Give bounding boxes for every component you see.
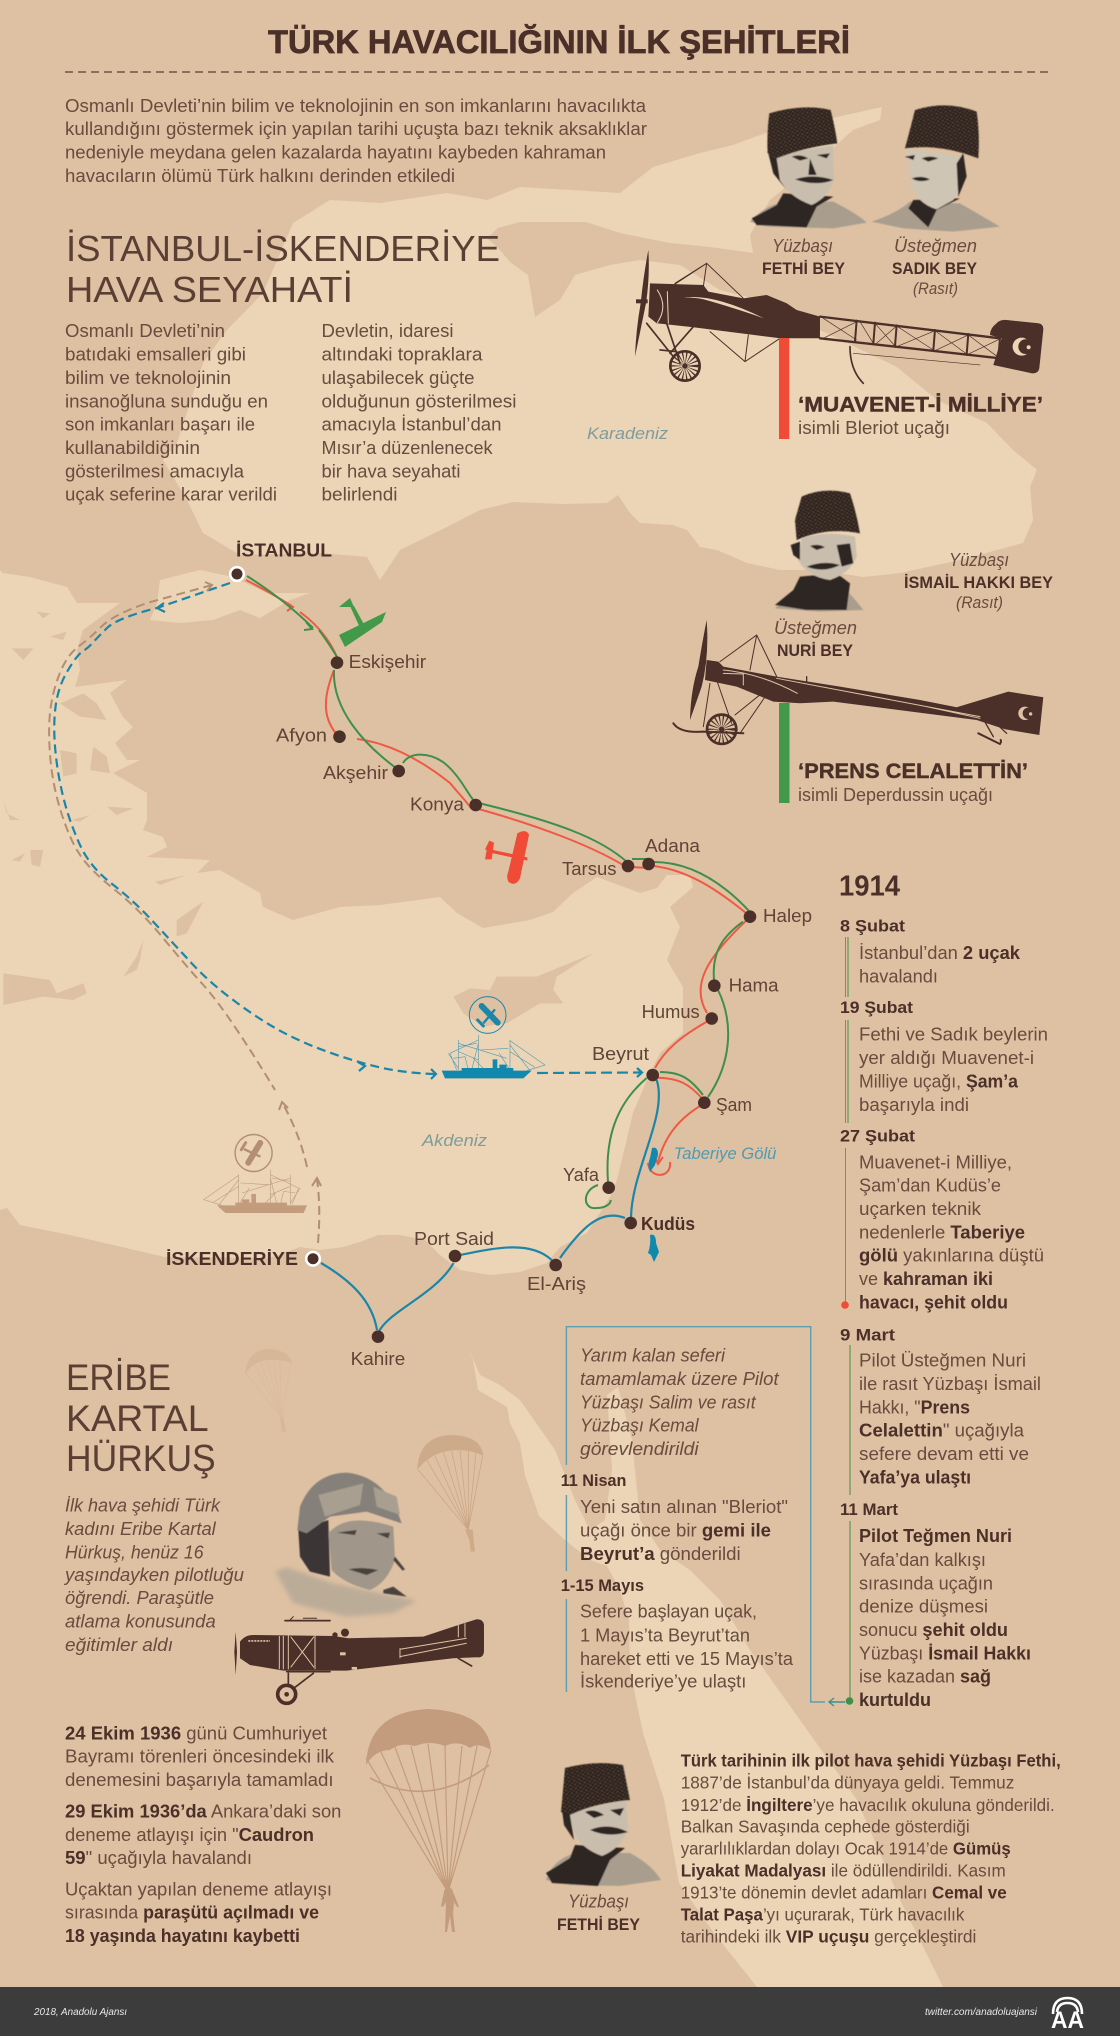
large parachute <box>366 1709 491 1932</box>
biography text <box>681 1751 1061 1947</box>
entry: 11 Mart: denize düşmesi <box>859 1597 988 1617</box>
heading: Eribe Kartal Hürkuş: HÜRKUŞ <box>66 1438 216 1479</box>
text: Eribe test jumps: 29 Ekim 1936’da Ankara’daki son <box>65 1802 341 1822</box>
entry: 9 Mart: Pilot Üsteğmen Nuri <box>859 1351 1026 1371</box>
biography text: Talat Paşa’yı uçurarak, Türk havacılık <box>681 1905 965 1925</box>
portrait labels: Fethi and Sadık: FETHİ BEY <box>762 259 846 278</box>
city labels: Humus <box>642 1002 700 1022</box>
heading: journey <box>66 228 500 310</box>
text: Eribe test jumps: 24 Ekim 1936 günü Cumhuriyet <box>65 1723 327 1743</box>
route: Prens Celalettin, green line <box>247 576 750 1208</box>
portrait labels: İsmail Hakkı and Nuri: Yüzbaşı <box>949 550 1009 570</box>
city labels: Afyon <box>276 726 327 746</box>
portrait labels: İsmail Hakkı and Nuri: NURİ BEY <box>777 641 854 660</box>
icon: green plane <box>339 598 386 647</box>
heading: Eribe Kartal Hürkuş: KARTAL <box>66 1398 209 1439</box>
entry: 11 Mart: 11 Mart <box>840 1500 898 1519</box>
entry: 11 Mart <box>840 1500 1031 1710</box>
text column one: son imkanları başarı ile <box>65 414 255 434</box>
marker bar: red <box>779 338 789 439</box>
footer credit: 2018, Anadolu Ajansı <box>33 2006 127 2018</box>
small parachute, faint <box>245 1349 292 1432</box>
text column two <box>322 321 516 504</box>
Eribe intro text <box>63 1496 244 1655</box>
entry: 8 Şubat <box>840 916 1021 986</box>
entry: 8 Şubat: havalandı <box>859 966 938 986</box>
plane: Caudron 59 <box>234 1617 484 1703</box>
text: Eribe test jumps: Bayramı törenleri öncesindeki ilk <box>65 1747 335 1767</box>
entry: 27 Şubat: Şam’dan Kudüs’e <box>859 1176 1001 1196</box>
timeline: 1914 <box>839 870 1048 1710</box>
text column one: insanoğluna sunduğu en <box>65 392 268 412</box>
entry: 27 Şubat: ve kahraman iki <box>859 1269 993 1289</box>
icon: Dead Sea <box>648 1235 659 1262</box>
city labels: Kudüs <box>641 1214 695 1234</box>
city labels: Konya <box>410 794 465 814</box>
entry: 9 Mart: Yafa’ya ulaştı <box>859 1467 971 1487</box>
portrait labels: İsmail Hakkı and Nuri: Üsteğmen <box>774 618 857 638</box>
city labels: Şam <box>716 1095 752 1115</box>
heading: journey: HAVA SEYAHATİ <box>66 269 353 310</box>
entry: 19 Şubat <box>840 998 1048 1115</box>
Eribe intro text: atlama konusunda <box>65 1612 216 1632</box>
route map <box>49 540 812 1369</box>
intro text: kullandığını göstermek için yapılan tarihi uçuşta bazı teknik aksaklıklar <box>65 119 647 139</box>
text column one: uçak seferine karar verildi <box>65 484 277 504</box>
icon: blue ship and plane <box>442 997 545 1078</box>
text column two: amacıyla İstanbul’dan <box>322 414 502 434</box>
entry: 11 Nisan <box>561 1471 788 1564</box>
portrait labels: Fethi and Sadık: Üsteğmen <box>894 236 977 256</box>
text column one: Osmanlı Devleti’nin <box>65 321 225 341</box>
entry: 11 Nisan: uçağı önce bir gemi ile <box>580 1521 771 1541</box>
portrait label: Fethi Bey: Yüzbaşı <box>568 1892 629 1912</box>
intro text <box>65 96 647 186</box>
Eribe intro text: Hürkuş, henüz 16 <box>65 1542 205 1562</box>
box intro: Yüzbaşı Kemal <box>580 1416 700 1436</box>
biography text: Balkan Savaşında cephede gösterdiği <box>681 1817 970 1837</box>
route: return by sea, tan dashed <box>49 582 321 1243</box>
city labels: İSKENDERİYE <box>166 1249 298 1269</box>
entry: 11 Nisan: 11 Nisan <box>561 1471 626 1490</box>
plane: Bleriot Muavenet-i Milliye <box>635 250 1043 383</box>
plane name: Muavenet-i Milliye: isimli Bleriot uçağı <box>798 418 950 438</box>
entry: 1-15 Mayıs <box>561 1576 794 1692</box>
biography text: tarihindeki ilk VIP uçuşu gerçekleştirdi <box>681 1927 976 1947</box>
text: Eribe test jumps: sırasında paraşütü açılmadı ve <box>65 1903 319 1923</box>
entry: 27 Şubat: Muavenet-i Milliye, <box>859 1152 1012 1172</box>
map: Red Sea and Gulf of Suez <box>467 1345 943 1987</box>
footer social: twitter.com/anadoluajansi <box>925 2006 1038 2018</box>
portrait labels: İsmail Hakkı and Nuri: İSMAİL HAKKI BEY <box>904 573 1054 592</box>
text: Eribe test jumps <box>65 1723 341 1946</box>
entry: 11 Mart: ise kazadan sağ <box>859 1667 991 1687</box>
heading: journey: İSTANBUL-İSKENDERİYE <box>66 228 500 269</box>
entry: 11 Mart: Yüzbaşı İsmail Hakkı <box>859 1643 1031 1663</box>
connector arrow <box>829 1698 845 1706</box>
portrait labels: İsmail Hakkı and Nuri: (Rasıt) <box>956 593 1003 612</box>
biography text: yararlılıklardan dolayı Ocak 1914’de Gümüş <box>681 1839 1011 1859</box>
entry: 11 Mart: Pilot Teğmen Nuri <box>859 1526 1012 1546</box>
map: Cyprus <box>453 953 593 1027</box>
city labels: Adana <box>645 836 701 856</box>
water labels: Taberiye Gölü <box>674 1144 777 1163</box>
city labels <box>166 540 812 1369</box>
entry: 9 Mart: Hakkı, "Prens <box>859 1397 970 1417</box>
map: Aegean and Mediterranean islands <box>3 612 203 1005</box>
route: outbound by sea, blue dashed <box>54 583 642 1079</box>
portrait labels: Fethi and Sadık: SADIK BEY <box>892 259 978 278</box>
intro text: Osmanlı Devleti’nin bilim ve teknolojinin en son imkanlarını havacılıkta <box>65 96 647 116</box>
text column two: Devletin, idaresi <box>322 321 454 341</box>
biography text: Türk tarihinin ilk pilot hava şehidi Yüzbaşı Fethi, <box>681 1751 1061 1771</box>
intro text: havacıların ölümü Türk halkını derinden etkiledi <box>65 166 455 186</box>
city labels: Beyrut <box>592 1044 649 1064</box>
Eribe intro text: eğitimler aldı <box>65 1635 173 1655</box>
entry: 11 Nisan: Yeni satın alınan "Bleriot" <box>580 1497 788 1517</box>
text column two: altındaki topraklara <box>322 344 484 364</box>
portrait labels: İsmail Hakkı and Nuri <box>774 550 1054 660</box>
entry: 9 Mart: sefere devam etti ve <box>859 1444 1029 1464</box>
text: Eribe test jumps: 18 yaşında hayatını kaybetti <box>65 1926 300 1946</box>
entry: 27 Şubat <box>840 1127 1044 1312</box>
entry: 19 Şubat: başarıyla indi <box>859 1095 969 1115</box>
heading: Eribe Kartal Hürkuş: ERİBE <box>66 1357 171 1398</box>
Eribe intro text: İlk hava şehidi Türk <box>65 1496 221 1516</box>
entry: 19 Şubat: yer aldığı Muavenet-i <box>859 1048 1034 1068</box>
city labels: Tarsus <box>562 859 616 879</box>
plane name: Muavenet-i Milliye <box>798 394 1043 438</box>
portrait labels: Fethi and Sadık <box>762 236 978 298</box>
city labels: Halep <box>763 906 812 926</box>
entry: 1-15 Mayıs: Sefere başlayan uçak, <box>580 1602 757 1622</box>
connector lines <box>566 1327 825 1702</box>
text column one: bilim ve teknolojinin <box>65 368 231 388</box>
portrait: Eribe Kartal Hürkuş <box>275 1473 417 1617</box>
timeline lines <box>846 937 850 1701</box>
text: Eribe test jumps: 59" uçağıyla havalandı <box>65 1848 252 1868</box>
text: Eribe test jumps: denemesini başarıyla tamamladı <box>65 1770 334 1790</box>
water labels <box>421 1131 777 1163</box>
intro text: nedeniyle meydana gelen kazalarda hayatını kaybeden kahraman <box>65 142 606 162</box>
entry: 1-15 Mayıs: İskenderiye’ye ulaştı <box>580 1672 746 1692</box>
entry: 1-15 Mayıs: 1-15 Mayıs <box>561 1576 644 1595</box>
plane: Deperdussin Prens Celalettin <box>673 620 1043 744</box>
city labels: Port Said <box>414 1229 494 1249</box>
logo: AA: AA <box>1051 2007 1084 2034</box>
entry: 19 Şubat: 19 Şubat <box>840 998 913 1017</box>
city labels: Akşehir <box>323 763 388 783</box>
biography text: 1912’de İngiltere’ye havacılık okuluna gönderildi. <box>681 1795 1055 1815</box>
entry: 11 Mart: sonucu şehit oldu <box>859 1620 1008 1640</box>
city labels: Yafa <box>563 1165 600 1185</box>
plane name: Muavenet-i Milliye: ‘MUAVENET-İ MİLLİYE’ <box>798 394 1043 416</box>
plane name: Prens Celalettin <box>798 760 1028 805</box>
entry: 9 Mart: 9 Mart <box>840 1326 895 1345</box>
text: Eribe test jumps: Uçaktan yapılan deneme atlayışı <box>65 1879 332 1899</box>
portrait labels: Fethi and Sadık: Yüzbaşı <box>772 236 833 256</box>
portrait: Nuri Bey <box>775 491 863 612</box>
text column one <box>65 321 277 504</box>
box: continuation of the flight <box>561 1327 845 1706</box>
entry: 27 Şubat: havacı, şehit oldu <box>859 1292 1008 1312</box>
plane name: Prens Celalettin: isimli Deperdussin uçağı <box>798 785 993 805</box>
small parachute <box>417 1435 483 1552</box>
sea label: Karadeniz: Karadeniz <box>587 424 669 443</box>
city labels: Eskişehir <box>349 652 426 672</box>
timeline end markers <box>841 1301 853 1705</box>
icon: Sea of Galilee <box>648 1148 658 1172</box>
city labels: El-Ariş <box>527 1274 586 1294</box>
portrait: Yüzbaşı Fethi Bey <box>546 1763 661 1886</box>
plane name: Prens Celalettin: ‘PRENS CELALETTİN’ <box>798 760 1028 783</box>
heading: Eribe Kartal Hürkuş <box>66 1357 216 1479</box>
text column one: gösterilmesi amacıyla <box>65 462 245 482</box>
biography text: 1913’te dönemin devlet adamları Cemal ve <box>681 1883 1007 1903</box>
text column two: Mısır’a düzenlenecek <box>322 438 493 458</box>
entry: 11 Mart: kurtuldu <box>859 1690 931 1710</box>
entry: 27 Şubat: nedenlerle Taberiye <box>859 1222 1025 1242</box>
portrait: Fethi and Sadık <box>750 105 1000 232</box>
entry: 9 Mart: ile rasıt Yüzbaşı İsmail <box>859 1374 1041 1394</box>
entry: 11 Mart: Yafa’dan kalkışı <box>859 1550 986 1570</box>
entry: 9 Mart <box>840 1326 1041 1487</box>
entry: 27 Şubat: gölü yakınlarına düştü <box>859 1246 1044 1266</box>
text column two: olduğunun gösterilmesi <box>322 392 516 412</box>
entry: 8 Şubat: 8 Şubat <box>840 916 905 936</box>
box intro: görevlendirildi <box>580 1439 700 1459</box>
entry: 1-15 Mayıs: 1 Mayıs’ta Beyrut’tan <box>580 1626 750 1646</box>
biography text: 1887’de İstanbul’da dünyaya geldi. Temmuz <box>681 1773 1014 1793</box>
box intro <box>580 1346 780 1459</box>
box intro: Yarım kalan seferi <box>580 1346 726 1366</box>
icon: tan ship and plane <box>204 1134 307 1213</box>
city dots <box>230 567 756 1343</box>
city labels: Kahire <box>351 1349 405 1369</box>
entry: 1-15 Mayıs: hareket etti ve 15 Mayıs’ta <box>580 1649 794 1669</box>
entry: 8 Şubat: İstanbul’dan 2 uçak <box>859 943 1021 963</box>
entry: 9 Mart: Celalettin" uçağıyla <box>859 1421 1025 1441</box>
Eribe intro text: öğrendi. Paraşütle <box>65 1588 214 1608</box>
entry: 11 Nisan: Beyrut’a gönderildi <box>580 1544 741 1564</box>
Eribe intro text: kadını Eribe Kartal <box>65 1519 217 1539</box>
text column two: bir hava seyahati <box>322 462 460 482</box>
entry: 19 Şubat: Fethi ve Sadık beylerin <box>859 1025 1048 1045</box>
biography text: Liyakat Madalyası ile ödüllendirildi. Kasım <box>681 1861 1006 1881</box>
portrait labels: Fethi and Sadık: (Rasıt) <box>913 279 958 298</box>
entry: 27 Şubat: 27 Şubat <box>840 1127 915 1146</box>
entry: 19 Şubat: Milliye uçağı, Şam’a <box>859 1071 1019 1091</box>
text column one: batıdaki emsalleri gibi <box>65 344 246 364</box>
year heading: 1914 <box>839 870 900 902</box>
title: TÜRK HAVACILIĞININ İLK ŞEHİTLERİ <box>268 24 850 60</box>
city labels: Hama <box>729 976 780 996</box>
water labels: Akdeniz <box>421 1131 488 1150</box>
Eribe intro text: yaşındayken pilotluğu <box>63 1565 244 1585</box>
portrait label: Fethi Bey: FETHİ BEY <box>557 1915 641 1934</box>
route: third plane, blue line <box>321 1080 659 1332</box>
marker bar: green <box>779 703 790 803</box>
text: Eribe test jumps: deneme atlayışı için "Caudron <box>65 1825 314 1845</box>
footer <box>0 1987 1120 2036</box>
icon: red plane <box>485 831 529 884</box>
box intro: tamamlamak üzere Pilot <box>580 1369 780 1389</box>
entry: 11 Mart: sırasında uçağın <box>859 1573 993 1593</box>
text column one: kullanabildiğinin <box>65 438 200 458</box>
text column two: belirlendi <box>322 484 398 504</box>
route: Muavenet-i Milliye, red line <box>246 580 750 1175</box>
box intro: Yüzbaşı Salim ve rasıt <box>580 1392 757 1412</box>
entry: 27 Şubat: uçarken teknik <box>859 1199 982 1219</box>
portrait label: Fethi Bey <box>557 1892 641 1934</box>
city labels: İSTANBUL <box>236 540 332 560</box>
text column two: ulaşabilecek güçte <box>322 368 474 388</box>
